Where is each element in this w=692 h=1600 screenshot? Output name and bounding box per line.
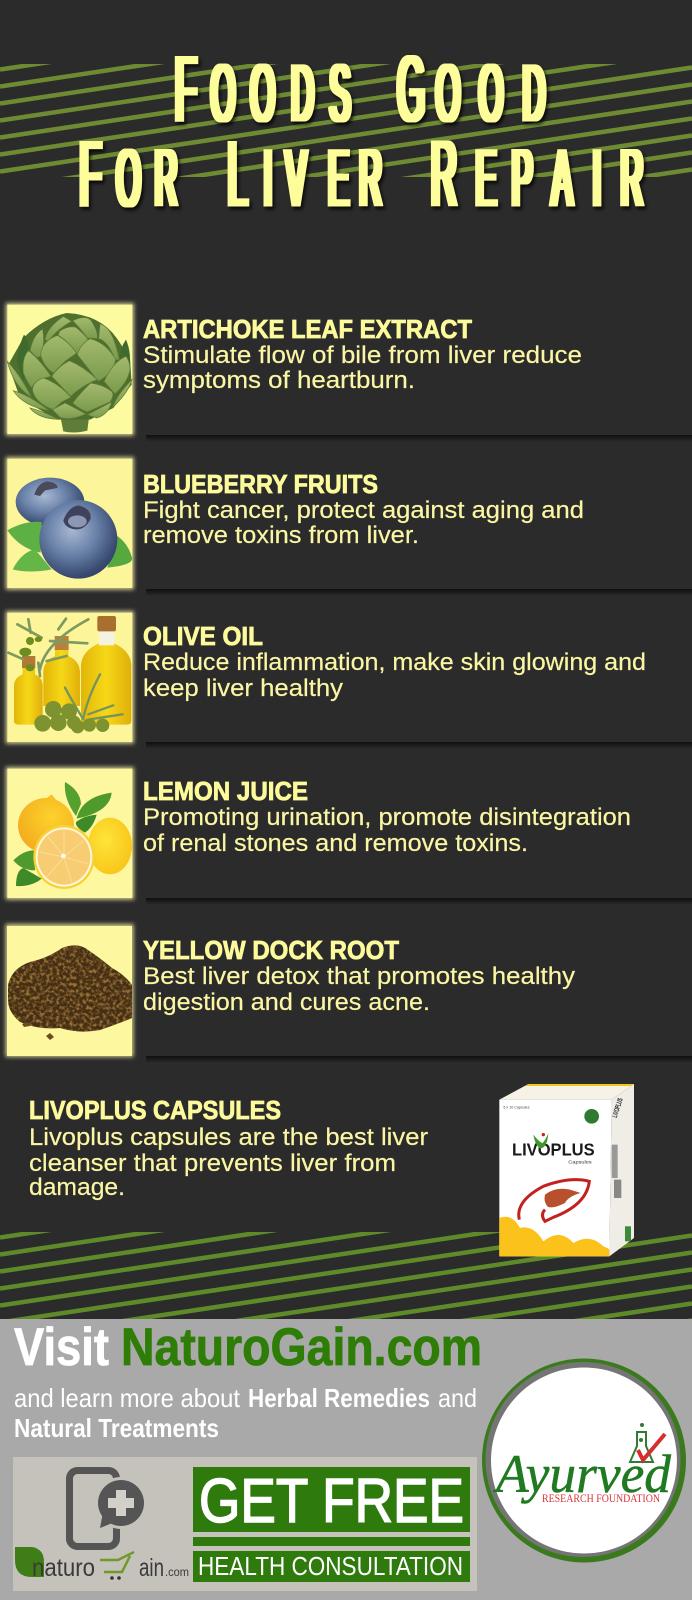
text: yellow dock root: digestion and cures acne. [143, 989, 430, 1016]
title line one: OODS [211, 48, 350, 140]
research foundation: RESEARCH FOUNDATION [542, 1491, 660, 1505]
text: learn more: and learn more about [14, 1383, 241, 1413]
title [80, 38, 643, 227]
panel: artichoke [6, 303, 582, 436]
text: artichoke: symptoms of heartburn. [143, 367, 415, 394]
panel: yellow dock root [6, 924, 575, 1057]
heading: livoplus: LIVOPLUS CAPSULES [29, 1095, 281, 1125]
text: olive oil: keep liver healthy [143, 675, 343, 702]
heading: artichoke: ARTICHOKE LEAF EXTRACT [143, 314, 472, 344]
ayurved wordmark: Ayurved [493, 1444, 672, 1504]
image: livoplus box [499, 1084, 634, 1256]
heading: olive oil: OLIVE OIL [143, 621, 263, 651]
image: livoplus box: LIVOPLUS [610, 1097, 625, 1119]
title line two: L [228, 123, 247, 227]
panel: lemon juice [6, 767, 631, 900]
title line two: EPAIR [476, 133, 643, 225]
text: lemon juice: of renal stones and remove toxins. [143, 830, 528, 857]
title line one: G [397, 38, 425, 142]
icon: flask with check [630, 1423, 665, 1462]
text: artichoke: Stimulate flow of bile from liver reduce [143, 342, 582, 369]
title line one: OOD [436, 48, 545, 140]
image: livoplus box: LIVOPLUS [512, 1139, 595, 1159]
text: learn more: Herbal Remedies [248, 1383, 430, 1413]
banner: health consultation: HEALTH CONSULTATION [198, 1551, 463, 1581]
text: livoplus: damage. [29, 1174, 125, 1201]
heading: yellow dock root: YELLOW DOCK ROOT [143, 935, 399, 965]
logo: naturogain: .com [165, 1565, 189, 1579]
top diagonal stripes [0, 64, 692, 177]
title line two: OR [116, 133, 177, 225]
row shadows [146, 435, 692, 1063]
heading: blueberry: BLUEBERRY FRUITS [143, 469, 378, 499]
panel: olive oil [6, 611, 646, 744]
image: livoplus box: Capsules [568, 1160, 592, 1165]
image: lemons [6, 767, 134, 900]
title line two: F [80, 123, 101, 227]
visit word: Visit [14, 1318, 109, 1377]
logo: naturogain [15, 1547, 189, 1582]
image: livoplus box: 5 x 10 Capsules [503, 1106, 530, 1110]
text: livoplus: Livoplus capsules are the best liver [29, 1124, 428, 1151]
text: blueberry: Fight cancer, protect against aging and [143, 497, 584, 524]
title line one: F [175, 38, 197, 142]
naturogain link: NaturoGain.com [121, 1318, 482, 1377]
logo: naturogain: naturo [32, 1554, 95, 1582]
image: artichoke [6, 303, 134, 436]
panel: livoplus capsules [29, 1084, 634, 1256]
image: blueberries [6, 457, 134, 590]
image: olive oil bottles [6, 611, 134, 744]
text: learn more [14, 1383, 477, 1443]
heading: visit naturogain [14, 1318, 482, 1377]
logo: ayurved [482, 1358, 686, 1562]
title line two: IVER [264, 133, 382, 225]
panel: blueberry [6, 457, 584, 590]
divider bar [193, 1537, 470, 1546]
image: dried root pile [6, 924, 134, 1057]
footer panel [0, 1319, 692, 1600]
text: blueberry: remove toxins from liver. [143, 522, 419, 549]
text: livoplus: cleanser that prevents liver from [29, 1150, 396, 1177]
logo: naturogain: ain [139, 1554, 164, 1582]
heading: lemon juice: LEMON JUICE [143, 776, 308, 806]
text: yellow dock root: Best liver detox that promotes healthy [143, 963, 575, 990]
bottom diagonal stripes [0, 1232, 692, 1319]
title line two: R [431, 123, 457, 227]
text: learn more: and [438, 1383, 477, 1413]
text: learn more: Natural Treatments [14, 1413, 219, 1443]
icon: phone with medical chat bubble [70, 1470, 147, 1546]
banner: get free: GET FREE [199, 1467, 464, 1536]
panel: free consultation [13, 1457, 477, 1591]
text: olive oil: Reduce inflammation, make skin glowing and [143, 649, 646, 676]
text: lemon juice: Promoting urination, promote disintegration [143, 804, 631, 831]
